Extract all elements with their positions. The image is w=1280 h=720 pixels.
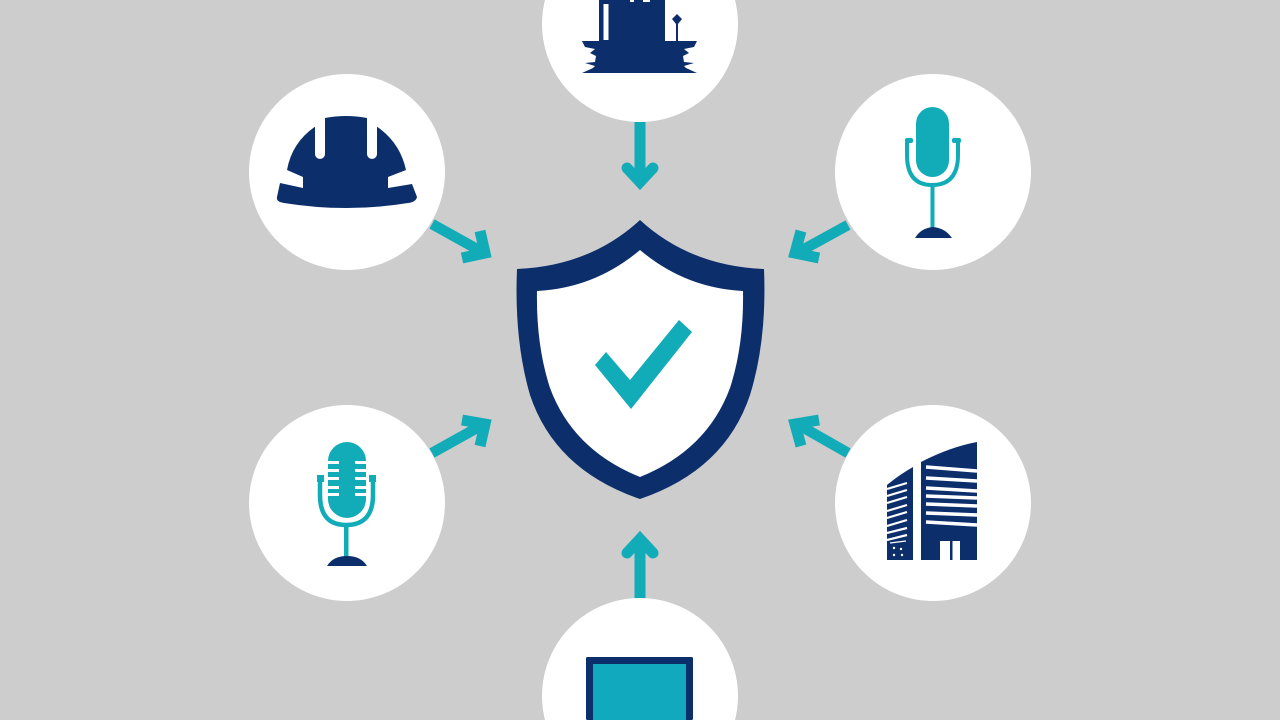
icon: studio microphone [905,107,961,238]
panel: ribbed microphone circle [249,405,445,601]
icon: check mark [595,320,692,409]
panel: bottom circle with tablet icon [542,598,738,720]
arrow: helmet to shield [432,224,485,258]
icon: ribbed microphone [317,442,376,566]
arrow: ribbed microphone to shield [432,420,485,453]
arrow: bottom icon to shield [627,539,653,600]
panel: top circle with machinery icon [542,0,738,122]
icon: office buildings [887,442,977,560]
icon: central shield [517,220,764,499]
icon: teal square [586,657,693,720]
icon: hard hat [277,112,417,208]
arrow: top icon to shield [627,122,653,182]
arrow: building to shield [795,420,848,453]
panel: building circle [835,405,1031,601]
panel: helmet circle [249,74,445,270]
panel: studio microphone circle [835,74,1031,270]
arrow: studio microphone to shield [795,225,848,258]
